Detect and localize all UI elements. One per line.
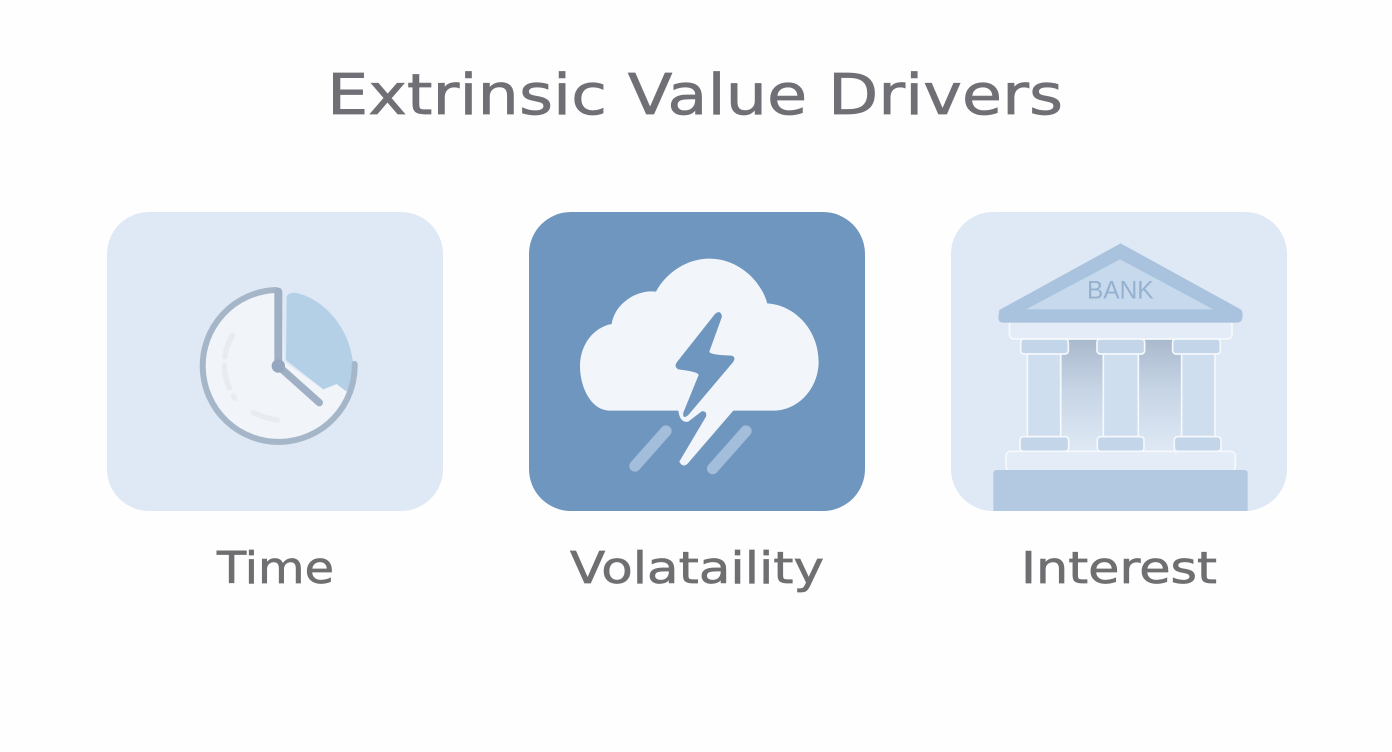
cloud with lower bolt [580,259,819,466]
card: volatility background [529,212,865,511]
upper step [1006,451,1235,471]
panel: interest [951,212,1287,511]
entablature [1009,320,1232,339]
label: volatility: Volataility [570,543,824,594]
blue time wedge [286,293,355,392]
pediment [998,243,1243,323]
card: time background [107,212,443,511]
bank text: BANK [1087,277,1154,305]
title: Extrinsic Value Drivers [327,63,1063,128]
clock rim [203,290,355,442]
clock face [202,290,353,442]
column right [1173,339,1221,451]
column left [1020,339,1069,451]
panel: time [107,212,443,511]
dashed inner arc [224,335,235,398]
shaded interior [1062,338,1182,452]
panel: volatility [529,212,865,511]
column center [1097,339,1145,451]
icon: bank [993,243,1248,511]
icon: storm cloud [580,259,819,469]
base [993,470,1248,511]
rain streak left [635,431,666,466]
dashed inner arc lower [253,413,277,420]
card: interest background [951,212,1287,511]
hub [272,359,285,373]
pediment inner [1026,259,1213,309]
label: interest: Interest [1021,543,1217,594]
rain streak right [713,431,746,469]
label: time: Time [216,543,334,594]
minute hand [266,292,290,366]
hour hand [278,366,319,403]
lightning bolt cutout [676,312,734,417]
icon: clock [202,290,355,442]
